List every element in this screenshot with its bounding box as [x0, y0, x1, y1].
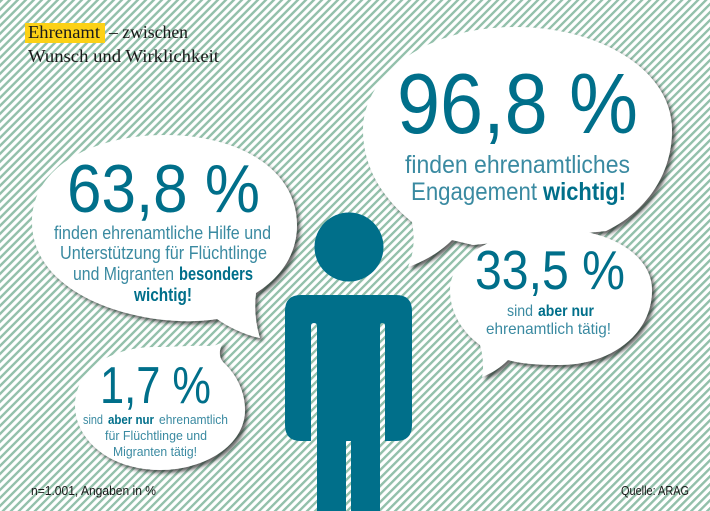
speech bubble text: 96,8 %: Engagement: [411, 178, 537, 206]
speech bubble: 1,7 %: 1,7 %: [100, 357, 211, 415]
speech bubble text: 33,5 %: aber nur: [538, 303, 594, 320]
speech bubble: 1,7 %: für Flüchtlinge und: [105, 428, 207, 443]
speech bubble: 63,8 %: finden ehrenamtliche Hilfe und: [54, 222, 271, 243]
footnote: sample size: n=1.001, Angaben in %: [31, 483, 156, 498]
title: Wunsch und Wirklichkeit: [28, 46, 219, 66]
speech bubble: 1,7 %: [75, 340, 245, 470]
speech bubble: 1,7 %: aber nur: [108, 412, 154, 427]
speech bubble: 1,7 %: ehrenamtlich: [159, 412, 228, 427]
speech bubble text: 33,5 %: [475, 239, 625, 338]
speech bubble text: 33,5 %: 33,5 %: [475, 239, 625, 301]
title: – zwischen: [108, 22, 188, 42]
speech bubble text: 96,8 %: 96,8 %: [397, 57, 638, 152]
speech bubble: 63,8 %: besonders: [179, 263, 253, 284]
title: [25, 22, 219, 66]
icon: person: [285, 212, 412, 511]
speech bubble: 1,7 %: Migranten tätig!: [113, 444, 197, 459]
speech bubble text: 33,5 %: ehrenamtlich tätig!: [486, 321, 611, 338]
speech bubble: 63,8 %: 63,8 %: [67, 151, 260, 227]
speech bubble: 63,8 %: und Migranten: [73, 263, 174, 284]
speech bubble: 63,8 %: Unterstützung für Flüchtlinge: [60, 242, 267, 263]
speech bubble text: 96,8 %: finden ehrenamtliches: [405, 151, 630, 179]
speech bubble: 1,7 %: sind: [83, 412, 103, 427]
speech bubble: 63,8 %: wichtig!: [133, 284, 192, 305]
speech bubble text: 33,5 %: sind: [507, 303, 533, 320]
speech bubble: 63,8 %: [32, 135, 297, 338]
speech bubble shapes: 96,8 % and 33,5 %: [363, 27, 672, 377]
footnote: source: Quelle: ARAG: [621, 483, 689, 498]
speech bubble text: 96,8 %: [397, 57, 638, 206]
speech bubble text: 96,8 %: wichtig!: [542, 178, 626, 206]
title: Ehrenamt: [28, 22, 100, 42]
